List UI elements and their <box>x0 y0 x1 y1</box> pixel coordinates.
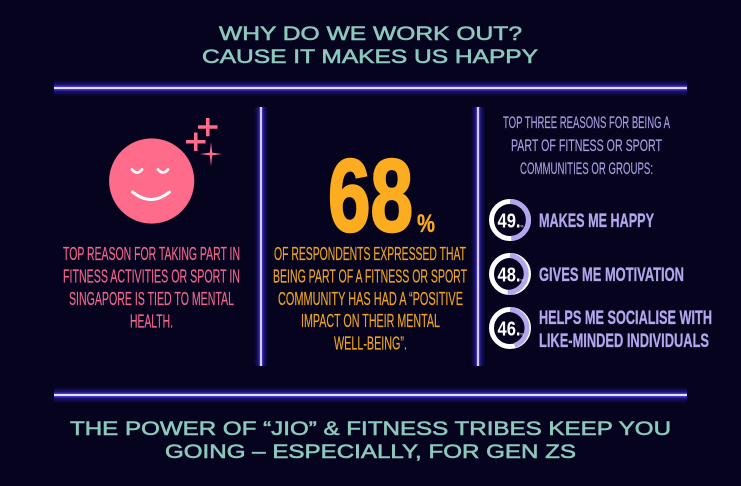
left vertical neon divider <box>254 107 268 366</box>
text: respondents: BEING PART OF A FITNESS OR SPORT <box>273 266 467 286</box>
text: top reason: HEALTH. <box>130 310 173 332</box>
title <box>202 24 538 68</box>
panel: top three reasons <box>492 114 712 352</box>
big number: % <box>417 210 435 238</box>
right vertical neon divider <box>471 107 485 366</box>
reason 46: 46. <box>498 318 520 340</box>
reason 48: 48. <box>498 264 520 286</box>
big number: 68 <box>328 138 413 253</box>
reason 46 <box>492 308 712 352</box>
title: WHY DO WE WORK OUT? <box>219 24 522 45</box>
bottom neon divider <box>54 387 687 403</box>
text: respondents: OF RESPONDENTS EXPRESSED THAT <box>274 243 466 264</box>
icon: sparkles <box>186 118 222 166</box>
footer heading: GOING – ESPECIALLY, FOR GEN ZS <box>165 442 576 463</box>
title: CAUSE IT MAKES US HAPPY <box>202 47 538 68</box>
reason 49 <box>492 202 654 238</box>
reason 48 <box>492 256 684 292</box>
heading: COMMUNITIES OR GROUPS: <box>520 160 653 178</box>
text: respondents: IMPACT ON THEIR MENTAL <box>301 310 440 331</box>
icon: smiling face <box>109 138 194 224</box>
text: top reason: FITNESS ACTIVITIES OR SPORT IN <box>63 266 240 286</box>
panel: 68 percent <box>273 138 467 354</box>
reason 49: 49. <box>498 210 520 232</box>
text: respondents: WELL-BEING”. <box>334 332 407 354</box>
reason 46: % <box>520 332 524 336</box>
text: top reason: SINGAPORE IS TIED TO MENTAL <box>69 288 234 309</box>
panel: mental health <box>63 118 240 332</box>
text: respondents <box>273 243 467 354</box>
text: top reason <box>63 243 240 332</box>
text: respondents: COMMUNITY HAS HAD A “POSITIVE <box>278 288 463 309</box>
reason 48: % <box>520 278 524 282</box>
heading: PART OF FITNESS OR SPORT <box>511 137 662 155</box>
reason 49: % <box>520 224 524 228</box>
footer heading: THE POWER OF “JIO” & FITNESS TRIBES KEEP YOU <box>70 419 671 440</box>
footer heading <box>70 419 671 463</box>
text: top reason: TOP REASON FOR TAKING PART IN <box>63 243 240 264</box>
top neon divider <box>54 80 687 96</box>
reason 49: MAKES ME HAPPY <box>539 211 654 232</box>
heading <box>503 114 670 178</box>
